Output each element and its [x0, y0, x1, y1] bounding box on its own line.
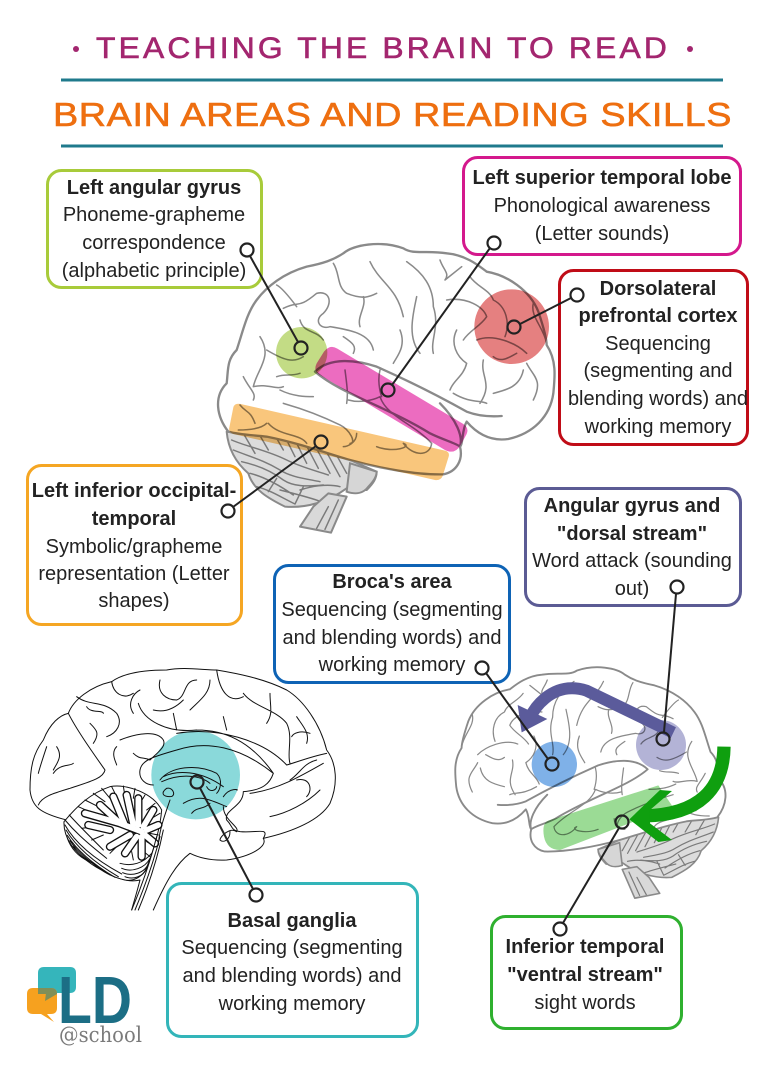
title: TEACHING THE BRAIN TO READ	[96, 32, 670, 65]
heading: inferior temporal ventral stream: Inferior temporal	[506, 936, 664, 958]
connector: dorsal stream	[656, 580, 684, 746]
logo: LD@school	[27, 963, 142, 1048]
text block: left superior temporal lobe skills: (Letter sounds)	[535, 223, 669, 245]
heading: dorsolateral prefrontal cortex: prefrontal cortex	[579, 305, 737, 327]
connector: dorsolateral prefrontal cortex	[508, 288, 584, 334]
icon: teal speech bubble	[38, 967, 76, 1001]
cerebellum	[64, 786, 163, 910]
text block: Broca's area skills: and blending words) and	[282, 627, 502, 649]
wordmark: LD: LD	[58, 963, 132, 1038]
illustration: small side-view brain	[455, 667, 726, 898]
text block: basal ganglia skills: Sequencing (segmenting	[181, 937, 403, 959]
panel: dorsolateral prefrontal cortex	[560, 270, 748, 444]
icon: orange speech bubble	[27, 988, 57, 1022]
text block: left superior temporal lobe skills: Phonological awareness	[494, 195, 710, 217]
text block: left angular gyrus skills: (alphabetic principle)	[62, 260, 246, 282]
heading: angular gyrus and dorsal stream	[544, 495, 720, 545]
heading: dorsolateral prefrontal cortex: Dorsolateral	[600, 278, 716, 300]
heading: basal ganglia: Basal ganglia	[228, 910, 357, 932]
heading: left angular gyrus: Left angular gyrus	[67, 177, 241, 199]
wordmark: @school: @school	[59, 1023, 142, 1048]
panel: basal ganglia	[168, 884, 418, 1036]
highlight: angular gyrus	[636, 720, 686, 770]
highlight: angular gyrus	[276, 327, 327, 378]
text block: dorsolateral skills: Sequencing	[605, 333, 711, 355]
panel: Broca's area	[274, 566, 510, 682]
text block: Broca's area skills	[281, 599, 503, 676]
connector: left superior temporal lobe	[382, 236, 500, 396]
text block: dorsal stream skills: Word attack (sounding	[532, 550, 732, 572]
heading: left inferior occipital-temporal: Left inferior occipital-	[32, 480, 236, 502]
text block: basal ganglia skills: working memory	[218, 993, 365, 1015]
text block: Broca's area skills: working memory	[318, 654, 465, 676]
highlight: occipital-temporal band	[229, 404, 449, 480]
illustration: sagittal brain	[30, 669, 335, 910]
heading: left inferior occipital-temporal: temporal	[92, 508, 176, 530]
text block: occipital-temporal skills	[38, 536, 230, 612]
connector: left inferior occipital-temporal	[222, 436, 328, 518]
connector: ventral stream	[554, 816, 628, 936]
highlights and arrows on small brain	[518, 688, 724, 850]
highlight: prefrontal cortex	[474, 289, 549, 364]
panel: left angular gyrus	[48, 170, 262, 288]
highlight: Broca's area	[532, 742, 577, 787]
text block: dorsal stream skills	[532, 550, 732, 600]
text block: occipital-temporal skills: shapes)	[98, 590, 170, 612]
highlight: basal ganglia	[151, 731, 240, 819]
connector: Broca's area	[476, 662, 558, 770]
highlight: inferior temporal band	[543, 785, 673, 850]
cortex folds	[38, 670, 327, 838]
text block: dorsolateral skills: blending words) and	[568, 388, 748, 410]
panel: angular gyrus and dorsal stream	[526, 488, 740, 606]
heading: left inferior occipital-temporal	[32, 480, 236, 530]
arrow: dorsal stream	[518, 688, 673, 733]
subtitle: BRAIN AREAS AND READING SKILLS	[53, 96, 732, 133]
text block: left angular gyrus skills: correspondence	[82, 232, 226, 254]
heading: inferior temporal ventral stream: "ventral stream"	[507, 964, 663, 986]
highlight: superior temporal band	[315, 347, 467, 452]
text block: left angular gyrus skills	[62, 204, 246, 282]
text block: dorsolateral skills	[568, 333, 748, 438]
deep structures	[158, 768, 237, 843]
text block: basal ganglia skills: and blending words) and	[182, 965, 402, 987]
heading: angular gyrus and dorsal stream: "dorsal stream"	[557, 523, 707, 545]
illustration: large side-view brain	[218, 244, 555, 533]
connector: left angular gyrus	[240, 244, 308, 354]
text block: basal ganglia skills	[181, 937, 403, 1015]
heading: Broca's area: Broca's area	[332, 571, 453, 593]
text block: ventral stream skills: sight words	[534, 992, 636, 1014]
heading: dorsolateral prefrontal cortex	[579, 278, 737, 327]
text block: Broca's area skills: Sequencing (segmenting	[281, 599, 503, 621]
text block: dorsolateral skills: (segmenting and	[584, 360, 732, 382]
text block: dorsolateral skills: working memory	[584, 416, 731, 438]
panel: left inferior occipital-temporal	[28, 466, 242, 624]
arrow: ventral stream	[629, 747, 724, 842]
text block: dorsal stream skills: out)	[615, 578, 649, 600]
panel: inferior temporal ventral stream	[492, 916, 682, 1028]
panel: left superior temporal lobe	[464, 158, 740, 254]
heading: left superior temporal lobe: Left superior temporal lobe	[473, 167, 731, 189]
connector: basal ganglia	[190, 776, 262, 902]
text block: occipital-temporal skills: representation (Letter	[38, 563, 230, 585]
text block: occipital-temporal skills: Symbolic/grapheme	[46, 536, 222, 558]
text block: left angular gyrus skills: Phoneme-grapheme	[63, 204, 245, 226]
text block: left superior temporal lobe skills	[494, 195, 710, 245]
heading: angular gyrus and dorsal stream: Angular gyrus and	[544, 495, 720, 517]
heading: inferior temporal ventral stream	[506, 936, 664, 986]
